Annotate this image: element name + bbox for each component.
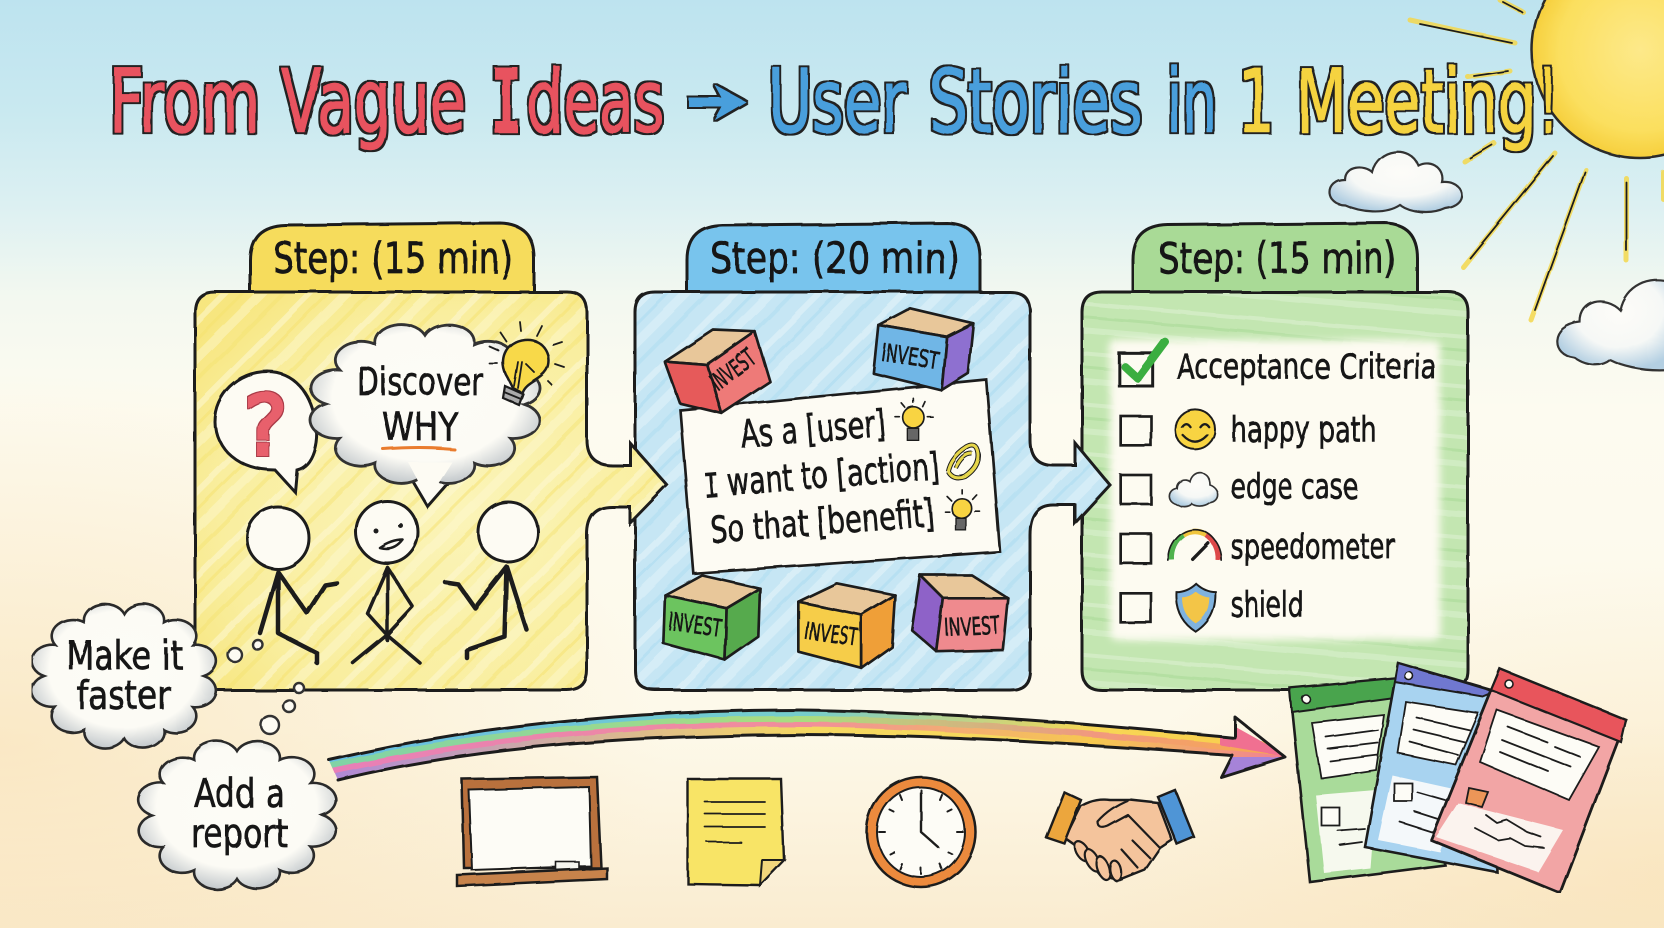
title: From [109, 51, 260, 153]
title: deas [527, 51, 664, 153]
thought cloud: make it faster: Make it [66, 634, 183, 679]
heading: acceptance criteria [1119, 342, 1437, 387]
thought cloud: discover why: WHY [382, 405, 459, 449]
box: purple and red invest [912, 575, 1008, 652]
speech bubble: question mark [215, 372, 317, 492]
criterion: edge case [1121, 467, 1358, 507]
title: 1 [1238, 51, 1275, 153]
box: yellow invest [798, 583, 895, 668]
title: User [768, 51, 906, 153]
user story card: So that [benefit] [709, 491, 936, 552]
cloud: upper sky [1330, 152, 1462, 212]
title: ! [1538, 51, 1558, 153]
user story card: I want to [action] [701, 444, 941, 509]
tab: step 2: Step: (20 min) [710, 234, 960, 284]
criterion: speedometer: speedometer [1231, 527, 1396, 567]
heading: acceptance criteria: Acceptance Criteria [1177, 347, 1437, 387]
title: I [491, 52, 521, 162]
icon: paper clip [948, 445, 978, 478]
box: green invest: INVEST [666, 608, 723, 643]
panel: step 1 discover why [195, 223, 667, 690]
icon: lightbulb small [895, 398, 933, 440]
box: red invest: INVEST [704, 344, 761, 396]
title: in [1167, 51, 1217, 153]
icon: lightbulb [490, 322, 564, 405]
arrow: rainbow progress [320, 710, 1290, 782]
icon: sun with rays [1410, 0, 1664, 320]
tab: step 2 [687, 223, 980, 294]
criterion: edge case: edge case [1231, 467, 1358, 507]
box: blue invest: INVEST [880, 339, 940, 375]
thought cloud: add a report: Add a [194, 772, 285, 817]
thought cloud: make it faster: faster [77, 674, 172, 719]
speech bubble: question mark: ? [243, 377, 288, 475]
documents: finished user stories [1290, 663, 1626, 893]
box: red invest [665, 330, 770, 413]
criterion: happy path [1121, 409, 1377, 451]
criterion: shield [1121, 583, 1303, 632]
thought cloud: make it faster [32, 604, 216, 748]
title arrow [689, 85, 746, 120]
thought cloud: discover why [311, 325, 539, 507]
thought cloud: discover why: Discover [357, 360, 483, 404]
box: purple and red invest: INVEST [944, 611, 1001, 642]
icon: whiteboard [457, 777, 607, 886]
tab: step 1 [250, 223, 534, 294]
icon: clock [866, 777, 976, 887]
box: blue invest [873, 308, 973, 390]
tab: step 3: Step: (15 min) [1158, 234, 1397, 284]
user story card [680, 380, 1000, 573]
title: Meeting [1296, 51, 1536, 153]
document: green [1290, 678, 1445, 882]
title [109, 51, 1558, 162]
criterion: shield: shield [1231, 586, 1303, 626]
box: green invest [663, 575, 760, 660]
panel: step 2 user story [635, 223, 1110, 690]
document: blue [1365, 663, 1497, 872]
title: Vague [281, 51, 466, 153]
thought cloud: add a report [138, 741, 336, 889]
icon: lightbulb small [945, 489, 980, 530]
figure: centre person smiling [353, 501, 420, 663]
tab: step 3 [1133, 223, 1417, 294]
tab: step 1: Step: (15 min) [273, 234, 513, 284]
thought trail: bubbles [228, 640, 304, 734]
cloud: right edge [1557, 280, 1664, 370]
figure: right person [445, 502, 538, 658]
icon: sticky note [688, 779, 784, 885]
title: Stories [929, 51, 1142, 153]
criterion: happy path: happy path [1231, 411, 1377, 451]
thought cloud: add a report: report [191, 812, 288, 857]
icon: handshake [1046, 790, 1194, 882]
user story card: As a [user] [739, 401, 887, 456]
criterion: speedometer [1121, 527, 1396, 567]
document: red [1431, 669, 1626, 893]
box: yellow invest: INVEST [802, 617, 860, 652]
figure: left person [247, 507, 337, 663]
panel: step 3 acceptance criteria [1082, 223, 1468, 690]
